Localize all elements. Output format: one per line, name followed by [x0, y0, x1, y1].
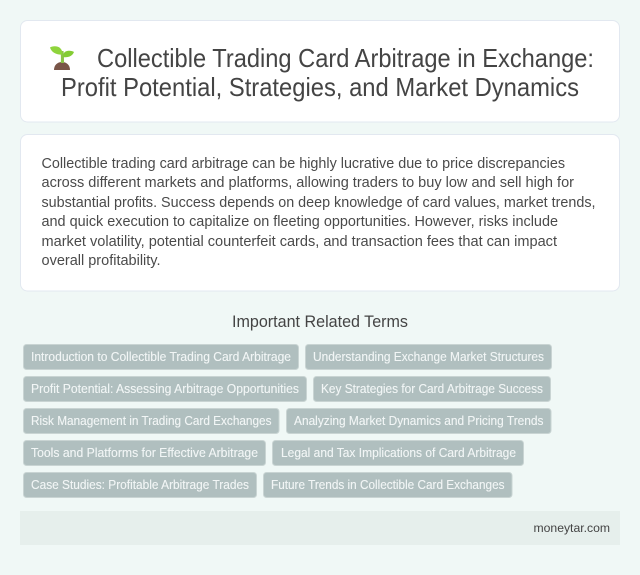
tag — [286, 408, 551, 434]
tag: Key Strategies for Card Arbitrage Success — [321, 382, 543, 396]
panel: related term tags — [24, 344, 552, 498]
summary text: substantial profits. Success depends on deep knowledge of card values, market trends, — [42, 195, 596, 211]
summary text — [42, 156, 596, 269]
icon: sprout — [50, 46, 74, 70]
panel: summary card — [20, 134, 620, 291]
tag: Risk Management in Trading Card Exchanges — [31, 414, 272, 428]
tag: Future Trends in Collectible Card Exchanges — [271, 478, 504, 492]
title — [61, 45, 594, 102]
tag — [24, 472, 256, 498]
tag — [24, 376, 306, 402]
footer — [20, 511, 620, 545]
tag — [314, 376, 550, 402]
footer: moneytar.com — [534, 521, 610, 535]
summary text: and quick execution to capitalize on fleeting opportunities. However, risks include — [42, 214, 558, 230]
tag: Profit Potential: Assessing Arbitrage Opportunities — [31, 382, 299, 396]
tag: Legal and Tax Implications of Card Arbitrage — [281, 446, 516, 460]
tag — [24, 344, 298, 370]
tag: Understanding Exchange Market Structures — [313, 350, 544, 364]
tag — [24, 440, 266, 466]
panel: title card — [20, 20, 620, 122]
title: Collectible Trading Card Arbitrage in Exchange: — [97, 45, 594, 73]
tag — [24, 408, 279, 434]
tag: Introduction to Collectible Trading Card Arbitrage — [31, 350, 291, 364]
summary text: Collectible trading card arbitrage can be highly lucrative due to price discrepancies — [42, 156, 565, 172]
summary text: market volatility, potential counterfeit cards, and transaction fees that can impact — [42, 234, 557, 250]
tag: Tools and Platforms for Effective Arbitrage — [31, 446, 258, 460]
summary text: across different markets and platforms, allowing traders to buy low and sell high for — [42, 175, 574, 191]
tag — [264, 472, 512, 498]
tag — [306, 344, 552, 370]
tag — [272, 440, 524, 466]
tag: Case Studies: Profitable Arbitrage Trades — [31, 478, 249, 492]
summary text: overall profitability. — [42, 253, 160, 269]
title: Profit Potential, Strategies, and Market Dynamics — [61, 74, 579, 102]
heading: important related terms: Important Related Terms — [232, 313, 408, 331]
tag: Analyzing Market Dynamics and Pricing Trends — [294, 414, 544, 428]
